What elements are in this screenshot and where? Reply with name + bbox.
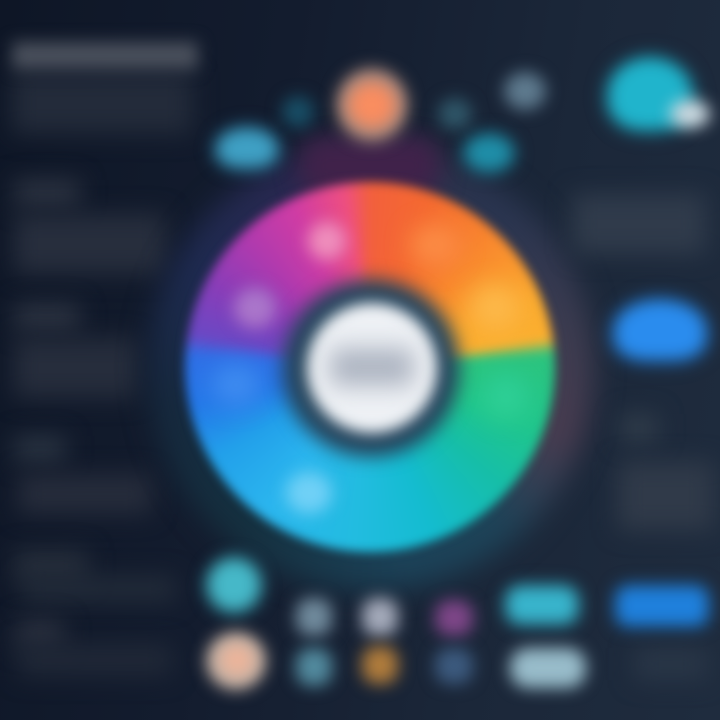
wheel highlight: blue bbox=[212, 365, 260, 405]
left column panel backdrop bbox=[12, 72, 192, 134]
left text block 4 body bbox=[22, 576, 176, 602]
wheel highlight: orange bbox=[410, 225, 460, 265]
legend: silver swatch bbox=[362, 598, 398, 636]
left text block 5 bbox=[16, 620, 64, 648]
legend: peach circle halo bbox=[206, 632, 266, 690]
icon: orange circle halo bbox=[336, 68, 408, 142]
wheel centre label bbox=[330, 348, 414, 386]
right text block bottom bbox=[618, 462, 714, 530]
left text block 4 bbox=[14, 550, 88, 582]
wheel highlight: green bbox=[484, 375, 528, 419]
legend: grey-blue swatch bbox=[296, 598, 332, 636]
right text block top bbox=[572, 194, 706, 254]
wheel highlight: amber bbox=[470, 285, 520, 330]
legend: purple swatch bbox=[435, 600, 473, 636]
legend: teal circle bbox=[207, 558, 261, 612]
icon: cloud left bbox=[216, 128, 278, 168]
outer halo around wheel bbox=[148, 145, 594, 591]
title bar bbox=[12, 42, 198, 69]
wheel centre disc bbox=[307, 303, 437, 433]
legend: orange swatch bbox=[362, 646, 398, 684]
right text heading bbox=[620, 414, 658, 442]
icon: orange circle core bbox=[348, 82, 396, 128]
left text block 2 bbox=[14, 304, 80, 330]
left text block 1 body bbox=[14, 214, 166, 274]
icon: white cloud part bbox=[670, 100, 710, 128]
icon: large teal cloud bbox=[608, 58, 692, 130]
wheel inner dark ring bbox=[282, 279, 460, 457]
left text block 3 body bbox=[18, 474, 152, 514]
legend: slate blue swatch bbox=[435, 648, 473, 684]
left text block 2 body bbox=[14, 338, 138, 398]
legend: pale pill bbox=[510, 648, 586, 688]
left text block 1 bbox=[14, 180, 80, 206]
legend: teal swatch bbox=[296, 648, 332, 686]
legend: peach circle core bbox=[220, 644, 254, 676]
legend: teal pill bbox=[506, 586, 578, 624]
icon: small dot mid bbox=[438, 98, 472, 130]
right bottom text bbox=[634, 648, 708, 680]
wheel highlight: sky bbox=[286, 472, 332, 514]
icon: blue cloud bbox=[614, 300, 706, 360]
wheel highlight: pink bbox=[308, 222, 346, 260]
wheel highlight: purple bbox=[234, 288, 276, 328]
left text block 3 bbox=[14, 436, 66, 462]
left text block 5 body bbox=[18, 644, 172, 676]
wheel ring segments bbox=[185, 182, 555, 552]
legend: blue pill bbox=[616, 586, 708, 626]
top connector glow bbox=[300, 136, 440, 196]
icon: small dot left bbox=[282, 96, 314, 128]
icon: teal cloud small bbox=[464, 134, 514, 172]
icon: grey dot bbox=[504, 72, 546, 110]
